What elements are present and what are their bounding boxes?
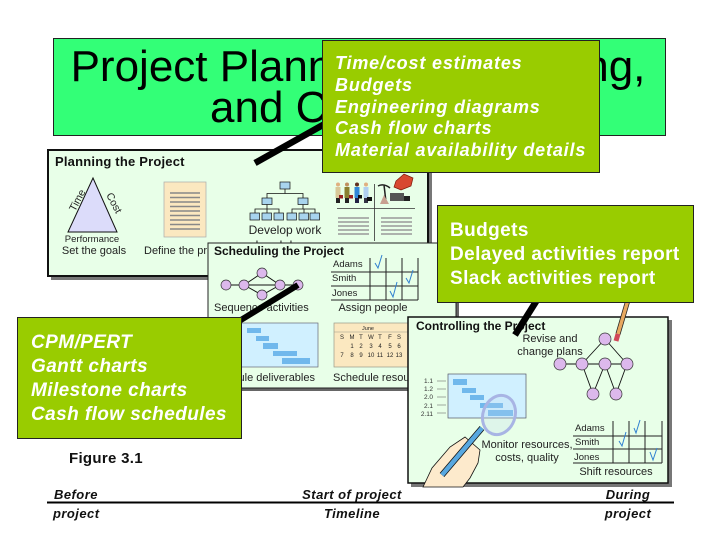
revise plans network: change plans <box>517 346 583 358</box>
icon: people and materials <box>336 174 415 241</box>
timeline label: start of project: Start of project <box>302 487 402 502</box>
icon: work breakdown structure: Develop work <box>249 223 322 237</box>
calendar: 10 <box>368 353 375 359</box>
calendar: 13 <box>396 353 403 359</box>
calendar: 5 <box>388 344 392 350</box>
planning heading: Planning the Project <box>55 154 185 169</box>
calendar: T <box>378 335 382 341</box>
timeline label: start of project <box>302 487 402 521</box>
people assignment table: Adams <box>333 259 363 270</box>
monitoring gantt chart: 2.11 <box>421 411 433 418</box>
icon: project document <box>144 182 230 257</box>
activity network <box>214 268 309 314</box>
connector: planning to callout <box>255 121 330 163</box>
callout: scheduling outputs: CPM/PERT <box>31 332 133 353</box>
callout: planning outputs <box>322 40 600 172</box>
shift resources table <box>573 420 662 478</box>
callout: planning outputs: Cash flow charts <box>335 118 492 138</box>
icon: triangle of goals <box>62 178 127 257</box>
calendar: Schedule resources <box>333 372 431 384</box>
calendar: 8 <box>350 353 354 359</box>
callout: scheduling outputs: Milestone charts <box>31 380 188 401</box>
people assignment table: Assign people <box>338 302 408 314</box>
timeline label: before project: Before <box>54 487 98 502</box>
monitoring gantt chart: 1.2 <box>424 386 433 393</box>
calendar: June <box>362 326 374 332</box>
callout: controlling outputs: Delayed activities report <box>450 244 680 265</box>
timeline <box>47 487 674 521</box>
monitoring gantt chart: 2.1 <box>424 403 433 410</box>
calendar <box>333 323 431 384</box>
people assignment table: Jones <box>332 288 358 299</box>
icon: pencil <box>616 300 628 341</box>
calendar: S <box>340 335 344 341</box>
callout: scheduling outputs <box>18 318 242 438</box>
timeline label: during project: During <box>606 487 650 502</box>
revise plans network <box>517 333 633 400</box>
icon: triangle of goals: Set the goals <box>62 245 127 257</box>
monitoring gantt chart: 1.1 <box>424 378 433 385</box>
calendar: 1 <box>350 344 354 350</box>
timeline label: before project <box>52 487 100 521</box>
calendar: 12 <box>387 353 394 359</box>
connector: scheduling to callout <box>236 285 298 323</box>
callout: planning outputs: Engineering diagrams <box>335 97 541 117</box>
timeline label: during project <box>604 487 651 521</box>
shift resources table: Shift resources <box>579 466 653 478</box>
people assignment table: Smith <box>332 273 356 284</box>
icon: project document: Define the project <box>144 245 230 257</box>
shift resources table: Smith <box>575 437 599 448</box>
calendar: 3 <box>369 344 373 350</box>
calendar: 2 <box>359 344 363 350</box>
title banner <box>54 38 666 136</box>
timeline label: during project: project <box>604 506 651 521</box>
gantt chart: Schedule deliverables <box>207 372 315 384</box>
people assignment table <box>331 255 418 314</box>
icon: triangle of goals: Time <box>67 187 88 213</box>
calendar: 4 <box>378 344 382 350</box>
callout: planning outputs: Time/cost estimates <box>335 53 523 73</box>
monitoring gantt chart: 2.0 <box>424 394 433 401</box>
calendar: T <box>359 335 363 341</box>
icon: hand with magnifying glass <box>423 391 521 487</box>
shift resources table: Adams <box>575 423 605 434</box>
timeline label: start of project: Timeline <box>324 506 380 521</box>
panel: scheduling the project <box>207 243 459 391</box>
connector: controlling to callout <box>515 300 537 335</box>
callout: controlling outputs: Slack activities report <box>450 268 656 289</box>
monitor label: costs, quality <box>495 452 559 464</box>
callout: controlling outputs <box>438 206 694 302</box>
panel: controlling the project <box>408 317 672 487</box>
revise plans network: Revise and <box>522 333 578 345</box>
monitoring gantt chart <box>421 374 526 418</box>
callout: planning outputs: Material availability details <box>335 140 586 160</box>
timeline label: before project: project <box>52 506 100 521</box>
callout: planning outputs: Budgets <box>335 75 413 95</box>
calendar: 11 <box>377 353 384 359</box>
gantt chart <box>207 323 318 384</box>
calendar: F <box>388 335 392 341</box>
scheduling heading: Scheduling the Project <box>214 244 344 258</box>
calendar: 7 <box>340 353 344 359</box>
panel: planning the project <box>48 150 432 280</box>
callout: controlling outputs: Budgets <box>450 220 529 241</box>
icon: triangle of goals: Cost <box>103 191 124 216</box>
title banner: and Controlling <box>210 83 506 132</box>
monitor label: Monitor resources, <box>481 439 573 451</box>
icon: work breakdown structure: breakdown <box>256 238 314 252</box>
figure caption: Figure 3.1 <box>69 450 143 467</box>
calendar: M <box>350 335 354 341</box>
icon: work breakdown structure <box>249 182 322 252</box>
callout: scheduling outputs: Gantt charts <box>31 356 148 377</box>
monitor label <box>481 439 573 464</box>
callout: scheduling outputs: Cash flow schedules <box>31 404 227 425</box>
title banner: Project Planning, Scheduling, <box>71 42 645 91</box>
calendar: 6 <box>397 344 401 350</box>
shift resources table: Jones <box>574 452 600 463</box>
calendar: W <box>368 335 374 341</box>
calendar: 9 <box>359 353 363 359</box>
calendar: S <box>397 335 401 341</box>
icon: triangle of goals: Performance <box>65 234 119 245</box>
activity network: Sequence activities <box>214 302 309 314</box>
controlling heading: Controlling the Project <box>416 319 545 333</box>
